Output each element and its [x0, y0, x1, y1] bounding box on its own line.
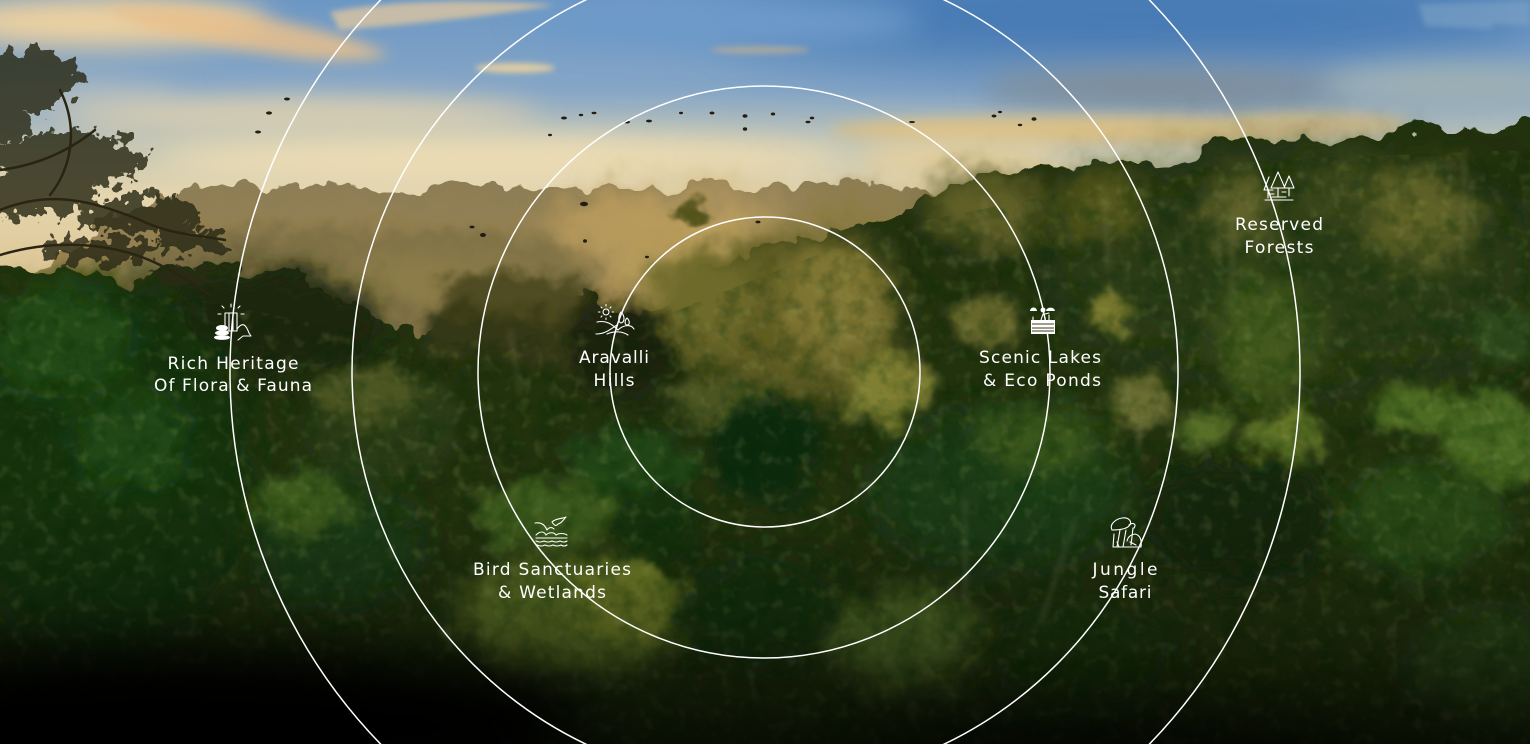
icon: jungle trees and animal	[1111, 518, 1141, 547]
leaf texture	[0, 150, 1530, 714]
label: Bird Sanctuaries & Wetlands	[473, 517, 631, 603]
sky patch top right	[1418, 1, 1530, 29]
label text: Jungle	[1092, 560, 1158, 580]
label text: Aravalli	[579, 348, 649, 368]
label: Rich Heritage Of Flora & Fauna	[154, 304, 312, 396]
background: tree at upper left	[0, 50, 225, 295]
label text: Scenic Lakes	[979, 348, 1101, 368]
label: Aravalli Hills: Hills	[594, 371, 635, 391]
background: sky	[0, 0, 1530, 300]
label: Rich Heritage Of Flora & Fauna: Of Flora & Fauna	[154, 376, 312, 396]
foreground tree trunks	[510, 150, 1465, 625]
flock of birds	[255, 98, 1036, 258]
label: Reserved Forests	[1235, 172, 1323, 258]
bottom darkness	[0, 500, 1530, 744]
icon: sun, trees and hills	[596, 304, 634, 335]
label: Bird Sanctuaries & Wetlands: & Wetlands	[498, 583, 606, 603]
label text: Reserved	[1235, 215, 1323, 235]
icon: heritage stones and monument	[214, 304, 251, 340]
icon: three conifer trees	[1264, 172, 1294, 200]
label: Reserved Forests: Forests	[1244, 238, 1314, 258]
label: Scenic Lakes & Eco Ponds	[979, 308, 1101, 391]
icon: birds over wetland	[535, 517, 567, 546]
label: Jungle Safari: Safari	[1098, 583, 1152, 603]
background: misty far hills	[20, 184, 950, 450]
label: Aravalli Hills	[579, 304, 649, 391]
label text: Bird Sanctuaries	[473, 560, 631, 580]
label: Scenic Lakes & Eco Ponds: & Eco Ponds	[983, 371, 1101, 391]
label text: Rich Heritage	[168, 354, 298, 374]
icon: lake with palms and clouds	[1030, 308, 1055, 334]
concentric rings	[230, 0, 1300, 744]
label: Jungle Safari	[1092, 518, 1158, 603]
